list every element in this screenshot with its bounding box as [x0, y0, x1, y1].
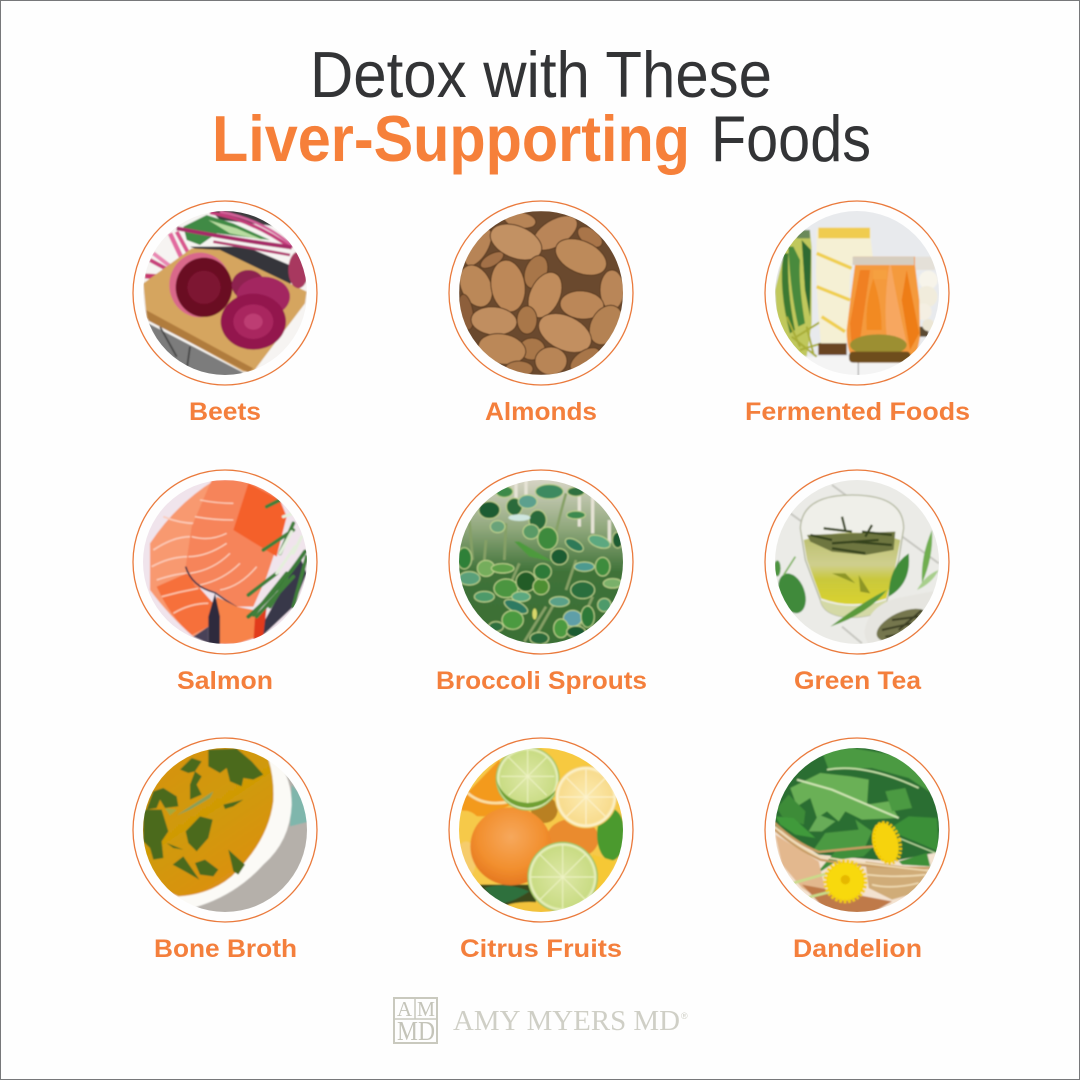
- label: broccoli sprouts: Broccoli Sprouts: [436, 667, 647, 695]
- title: [212, 38, 871, 175]
- panel: beets: [133, 201, 317, 426]
- icon: dandelion photo: [772, 746, 942, 916]
- title: Foods: [711, 102, 871, 175]
- registered mark: ®: [681, 1011, 688, 1021]
- panel: bone broth: [133, 738, 317, 963]
- panel: broccoli sprouts: [436, 470, 647, 695]
- icon: AM MD monogram box: [394, 997, 437, 1046]
- panel: citrus fruits: [446, 735, 633, 963]
- label: dandelion: Dandelion: [793, 935, 922, 963]
- label: fermented foods: Fermented Foods: [745, 398, 970, 426]
- icon: green tea photo: [772, 478, 942, 648]
- icon: fermented jars photo: [773, 208, 943, 378]
- title: Liver-Supporting: [212, 102, 690, 175]
- title: Detox with These: [310, 38, 772, 111]
- icon: AM MD monogram box: A: [397, 997, 413, 1021]
- logo: Amy Myers MD: [394, 997, 688, 1046]
- label: almonds: Almonds: [485, 398, 597, 426]
- wordmark: AMY MYERS MD: [453, 1005, 680, 1037]
- icon: AM MD monogram box: M: [417, 997, 435, 1021]
- panel: green tea: [765, 470, 949, 695]
- panel: fermented foods: [745, 201, 970, 426]
- icon: beets photo: [140, 208, 310, 378]
- icon: broccoli sprouts photo: [456, 478, 626, 648]
- icon: bone broth photo: [140, 746, 310, 916]
- icon: salmon photo: [140, 478, 310, 648]
- panel: dandelion: [765, 738, 949, 963]
- icon: almonds photo: [453, 209, 629, 377]
- label: salmon: Salmon: [177, 667, 273, 695]
- label: citrus fruits: Citrus Fruits: [460, 935, 622, 963]
- label: beets: Beets: [189, 398, 261, 426]
- label: bone broth: Bone Broth: [154, 935, 297, 963]
- icon: AM MD monogram box: MD: [397, 1016, 435, 1046]
- panel: salmon: [133, 470, 317, 695]
- label: green tea: Green Tea: [794, 667, 922, 695]
- icon: citrus fruits photo: [459, 748, 623, 912]
- panel: almonds: [449, 201, 633, 426]
